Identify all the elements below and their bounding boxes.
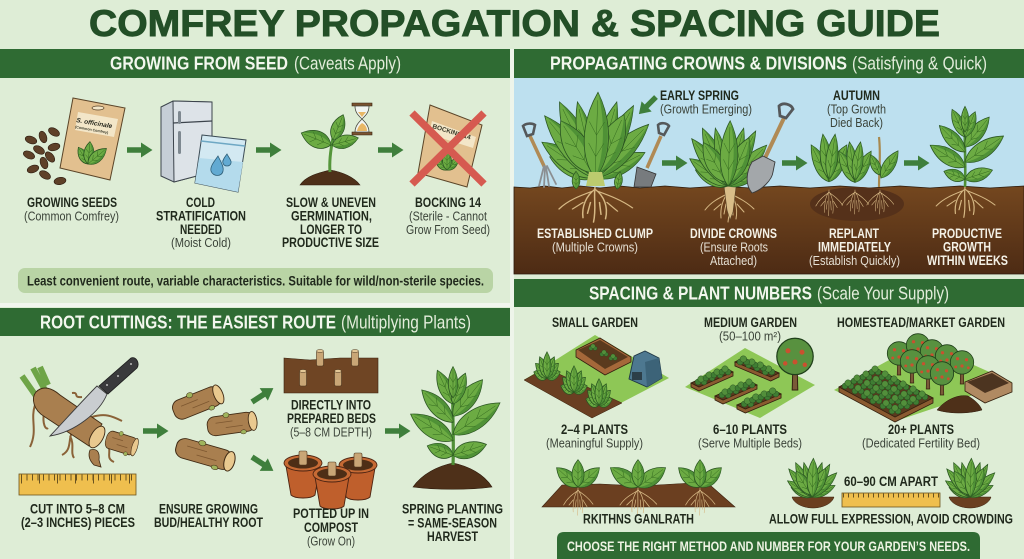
annotation: early spring: (Growth Emerging) <box>660 102 752 116</box>
label: bocking 14 <box>406 195 490 237</box>
heading: crowns: PROPAGATING CROWNS & DIVISIONS <box>550 54 847 74</box>
label: medium garden: MEDIUM GARDEN <box>704 315 797 330</box>
label: spring planting: HARVEST <box>427 529 479 544</box>
label: replant immediately <box>809 226 900 268</box>
panel: growing from seed <box>0 49 510 293</box>
label: established clump <box>537 226 653 254</box>
arrow <box>143 424 168 438</box>
sky <box>514 78 1024 190</box>
icon: seeds and seed packet <box>22 98 125 186</box>
icon: replanted crowns <box>806 133 903 216</box>
label: divide crowns <box>690 226 777 268</box>
arrow <box>127 142 152 158</box>
label: divide crowns: DIVIDE CROWNS <box>690 226 777 241</box>
label: directly into beds: PREPARED BEDS <box>287 411 376 426</box>
label: divide crowns: (Ensure Roots <box>700 240 768 254</box>
panel: root cuttings <box>0 308 510 548</box>
label: 20+ plants: (Dedicated Fertility Bed) <box>862 436 980 450</box>
panel: propagating crowns and divisions <box>514 49 1024 274</box>
heading: crowns <box>514 49 1024 78</box>
label: growing seeds: GROWING SEEDS <box>27 195 117 210</box>
label: cut into pieces: (2–3 INCHES) PIECES <box>21 515 135 530</box>
annotation: autumn: Died Back) <box>830 115 883 130</box>
label: medium garden: (50–100 m²) <box>719 328 781 344</box>
arrow: to pots <box>248 451 277 477</box>
label: cold stratification <box>156 195 246 250</box>
icon: sprout and hourglass <box>298 103 372 185</box>
label: spring planting: = SAME-SEASON <box>408 516 497 530</box>
icon: seeds and seed packet: (Common Comfrey) <box>75 125 109 135</box>
illustration: homestead garden <box>834 334 1012 422</box>
illustration: soil ridge with three plants <box>542 460 735 515</box>
label: ensure growing bud <box>154 502 264 530</box>
icon: pots <box>284 451 377 509</box>
label: slow germination: GERMINATION, <box>291 208 372 224</box>
callout: seed note: Least convenient route, variable characteristics. Suitable for wild/non-sterile species. <box>27 274 484 288</box>
title: COMFREY PROPAGATION & SPACING GUIDE <box>89 3 940 44</box>
callout: seed note <box>18 268 493 293</box>
soil <box>514 186 1024 274</box>
heading: growing from seed: (Caveats Apply) <box>294 54 401 74</box>
heading: root cuttings <box>0 308 510 336</box>
label: ensure growing bud: BUD/HEALTHY ROOT <box>154 515 264 530</box>
label: potted up: POTTED UP IN <box>293 506 369 521</box>
label: 6-10 plants: (Serve Multiple Beds) <box>698 436 802 450</box>
icon: mature plant with soil <box>406 367 505 489</box>
label: bocking 14: (Sterile - Cannot <box>409 208 487 224</box>
annotation: early spring <box>634 88 752 119</box>
icon: root pieces with buds <box>169 381 258 474</box>
label: cut into pieces: CUT INTO 5–8 CM <box>30 502 125 516</box>
label: productive growth: PRODUCTIVE <box>932 226 1002 241</box>
label: replant immediately: REPLANT <box>829 226 880 241</box>
label: potted up: COMPOST <box>304 520 359 535</box>
heading: root cuttings: (Multiplying Plants) <box>341 312 471 332</box>
label: slow germination: LONGER TO <box>300 222 362 237</box>
annotation: early spring: EARLY SPRING <box>660 88 739 103</box>
arrow <box>385 424 410 438</box>
icon: spade <box>747 104 793 193</box>
label: productive growth: GROWTH <box>943 240 991 254</box>
label: growing seeds: (Common Comfrey) <box>24 208 119 224</box>
label: ridge caption: RKITHNS GANLRATH <box>583 512 694 526</box>
icon: divided crown <box>686 121 772 222</box>
label: small garden: SMALL GARDEN <box>552 315 638 330</box>
icon: fridge and moist bag <box>161 101 246 192</box>
heading: root cuttings: ROOT CUTTINGS: THE EASIEST ROUTE <box>40 312 336 332</box>
label: divide crowns: Attached) <box>710 253 757 268</box>
label: 2-4 plants <box>546 422 643 450</box>
label: slow germination <box>282 195 379 250</box>
label: bocking 14: Grow From Seed) <box>406 222 490 237</box>
label: cold stratification: NEEDED <box>180 222 222 237</box>
label: directly into beds <box>287 398 376 440</box>
label: potted up <box>293 506 369 548</box>
label: cold stratification: (Moist Cold) <box>171 235 231 250</box>
label: 20+ plants: 20+ PLANTS <box>888 422 954 437</box>
arrow <box>904 156 930 170</box>
label: directly into beds: (5–8 CM DEPTH) <box>290 424 372 440</box>
heading: spacing <box>514 279 1024 307</box>
label: potted up: (Grow On) <box>307 534 355 548</box>
icon: crossed out Bocking 14 packet <box>412 105 484 187</box>
icon: seeds and seed packet: S. officinale <box>76 117 113 130</box>
label: established clump: ESTABLISHED CLUMP <box>537 226 653 241</box>
label: directly into beds: DIRECTLY INTO <box>291 398 371 412</box>
heading: spacing: (Scale Your Supply) <box>817 284 949 304</box>
label: established clump: (Multiple Crowns) <box>552 240 638 254</box>
label: spring planting: SPRING PLANTING <box>402 502 503 516</box>
icon: prepared bed with cuttings <box>284 350 378 393</box>
illustration: medium garden <box>685 338 815 418</box>
annotation: autumn: (Top Growth <box>827 102 886 116</box>
label: productive growth <box>927 226 1008 268</box>
icon: root being cut with knife <box>22 358 141 467</box>
label: 6-10 plants: 6–10 PLANTS <box>713 422 787 437</box>
label: ensure growing bud: ENSURE GROWING <box>159 502 258 516</box>
label: slow germination: PRODUCTIVE SIZE <box>282 235 379 250</box>
arrow <box>782 156 808 170</box>
label: medium garden <box>704 315 797 344</box>
illustration: spacing between plants <box>785 458 998 508</box>
label: spring planting <box>402 502 503 544</box>
label: 2-4 plants: 2–4 PLANTS <box>561 422 628 437</box>
heading: growing from seed: GROWING FROM SEED <box>110 54 288 74</box>
icon: trowel in clump <box>634 123 669 187</box>
arrow <box>378 142 404 158</box>
panel: spacing and plant numbers <box>514 279 1024 559</box>
label: replant immediately: (Establish Quickly) <box>809 253 900 268</box>
icon: crossed out Bocking 14 packet: BOCKING 14 <box>431 123 472 142</box>
heading: spacing: SPACING & PLANT NUMBERS <box>589 284 812 304</box>
illustration: small garden <box>524 335 669 418</box>
heading: growing from seed <box>0 49 510 78</box>
icon: fork <box>523 124 556 187</box>
arrow <box>256 142 282 158</box>
label: cold stratification: STRATIFICATION <box>156 208 246 224</box>
label: bocking 14: BOCKING 14 <box>415 195 481 210</box>
heading: crowns: (Satisfying & Quick) <box>852 54 987 74</box>
label: cut into pieces <box>21 502 135 530</box>
icon: productive plant <box>926 106 1008 217</box>
arrow <box>662 156 688 170</box>
label: 6-10 plants <box>698 422 802 450</box>
label: growing seeds <box>24 195 119 224</box>
label: slow germination: SLOW & UNEVEN <box>286 195 376 210</box>
label: replant immediately: IMMEDIATELY <box>818 240 891 254</box>
label: 20+ plants <box>862 422 980 450</box>
replant darker soil <box>810 187 904 221</box>
illustration: spacing between plants: 60–90 CM APART <box>844 474 939 489</box>
label: 2-4 plants: (Meaningful Supply) <box>546 436 643 450</box>
callout: footer banner <box>557 532 980 559</box>
arrow: to prepared beds <box>248 382 277 408</box>
icon: established clump <box>537 92 656 222</box>
label: cold stratification: COLD <box>186 195 215 210</box>
icon: ruler <box>19 474 136 495</box>
annotation: autumn: AUTUMN <box>833 88 880 103</box>
annotation: autumn <box>827 88 886 130</box>
